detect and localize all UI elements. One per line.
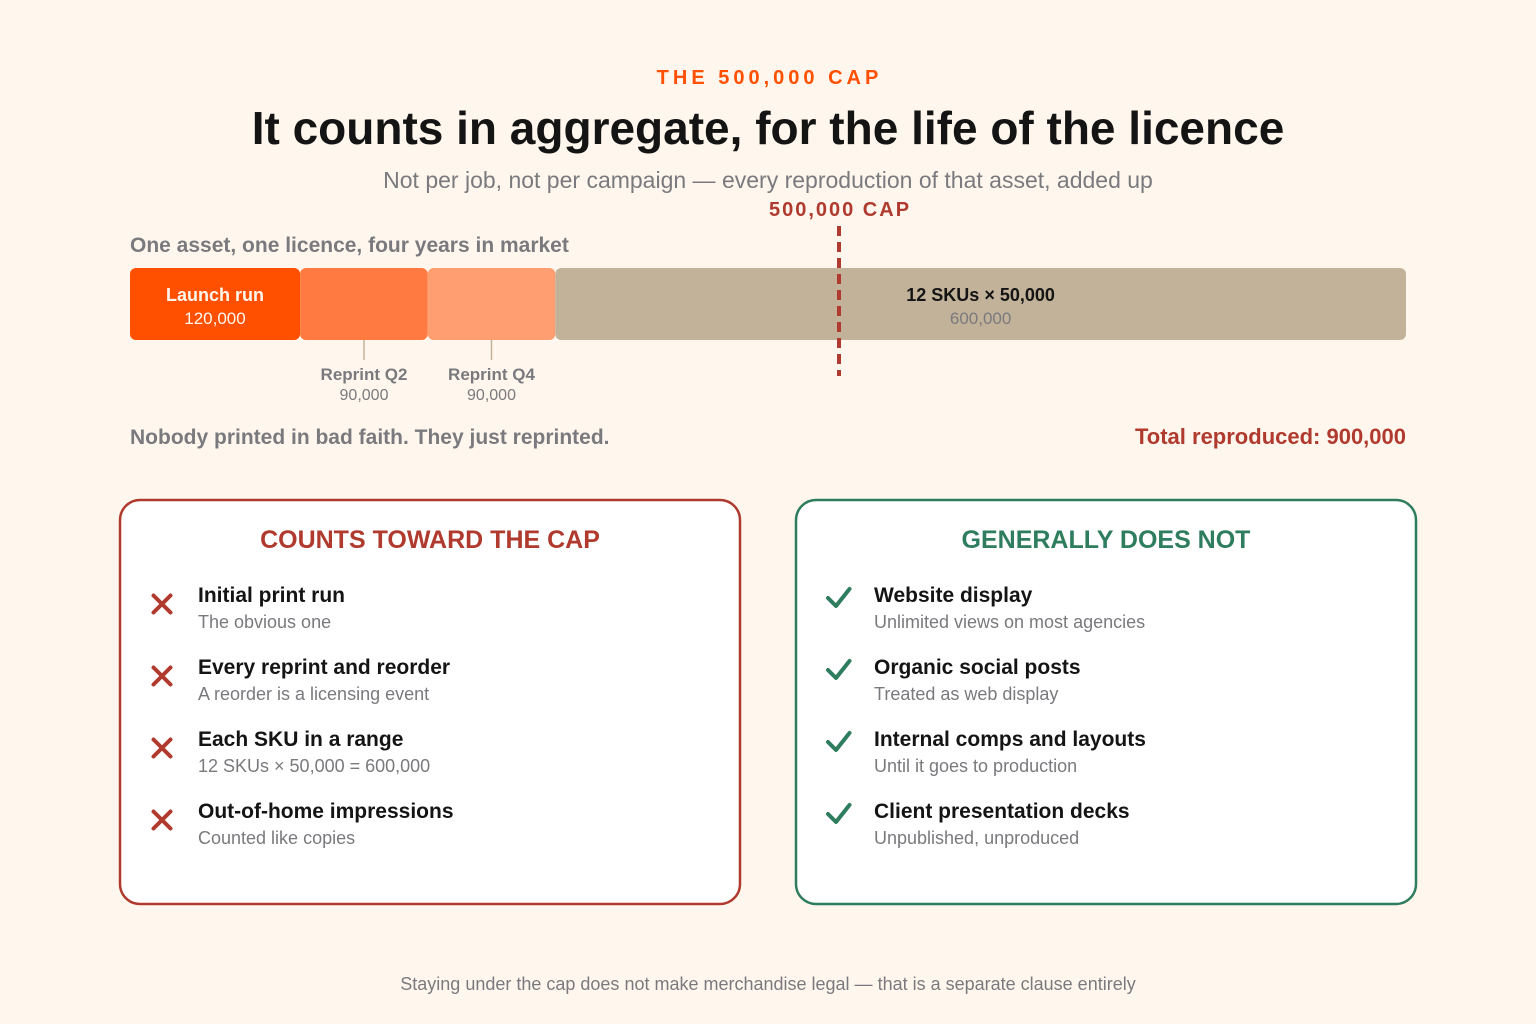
item: organic social: Organic social posts xyxy=(874,656,1081,679)
item: organic social xyxy=(828,656,1081,704)
item: internal comps xyxy=(828,728,1146,776)
total: Total reproduced: 900,000 xyxy=(1135,424,1406,449)
item: internal comps: Until it goes to production xyxy=(874,756,1077,776)
item: website display xyxy=(828,584,1145,632)
segment: reprint Q4: Reprint Q4 xyxy=(448,365,535,384)
item: every reprint: A reorder is a licensing event xyxy=(198,684,429,704)
panel: counts toward the cap xyxy=(120,500,740,904)
item: out-of-home xyxy=(154,800,454,848)
item: each SKU: Each SKU in a range xyxy=(198,728,403,751)
item: client decks xyxy=(828,800,1130,848)
segment: reprint Q4: 90,000 xyxy=(467,387,516,404)
heading: GENERALLY DOES NOT xyxy=(962,526,1250,554)
cap label: 500,000 CAP xyxy=(769,199,911,221)
item: out-of-home: Out-of-home impressions xyxy=(198,800,454,823)
heading: COUNTS TOWARD THE CAP xyxy=(260,526,600,554)
kicker: THE 500,000 CAP xyxy=(657,67,882,89)
segment: reprint Q2 xyxy=(300,268,428,404)
item: every reprint xyxy=(154,656,450,704)
panel: generally does not xyxy=(796,500,1416,904)
footer note: Staying under the cap does not make merchandise legal — that is a separate clause entirely xyxy=(400,974,1136,994)
segment: launch run: 120,000 xyxy=(184,309,246,328)
segment: 12 SKUs xyxy=(555,268,1406,340)
segment: reprint Q2: 90,000 xyxy=(340,387,389,404)
cap line xyxy=(837,226,841,376)
item: website display: Website display xyxy=(874,584,1033,607)
item: internal comps: Internal comps and layouts xyxy=(874,728,1146,751)
item: initial print run: The obvious one xyxy=(198,612,331,632)
item: initial print run xyxy=(154,584,345,632)
title: It counts in aggregate, for the life of the licence xyxy=(252,102,1284,154)
item: initial print run: Initial print run xyxy=(198,584,345,607)
item: client decks: Unpublished, unproduced xyxy=(874,828,1079,848)
chart heading: One asset, one licence, four years in market xyxy=(130,234,569,257)
stacked bar chart xyxy=(130,268,1406,404)
note: Nobody printed in bad faith. They just reprinted. xyxy=(130,426,610,449)
segment: launch run xyxy=(130,268,300,340)
item: client decks: Client presentation decks xyxy=(874,800,1130,823)
segment: launch run: Launch run xyxy=(166,285,264,305)
item: website display: Unlimited views on most agencies xyxy=(874,612,1145,632)
item: each SKU: 12 SKUs × 50,000 = 600,000 xyxy=(198,756,430,776)
subtitle: Not per job, not per campaign — every reproduction of that asset, added up xyxy=(383,167,1153,193)
item: every reprint: Every reprint and reorder xyxy=(198,656,450,679)
item: organic social: Treated as web display xyxy=(874,684,1058,704)
segment: 12 SKUs: 12 SKUs × 50,000 xyxy=(906,285,1055,305)
segment: reprint Q2: Reprint Q2 xyxy=(321,365,407,384)
segment: reprint Q4 xyxy=(428,268,555,404)
segment: 12 SKUs: 600,000 xyxy=(950,309,1011,328)
item: out-of-home: Counted like copies xyxy=(198,828,355,848)
item: each SKU xyxy=(154,728,430,776)
